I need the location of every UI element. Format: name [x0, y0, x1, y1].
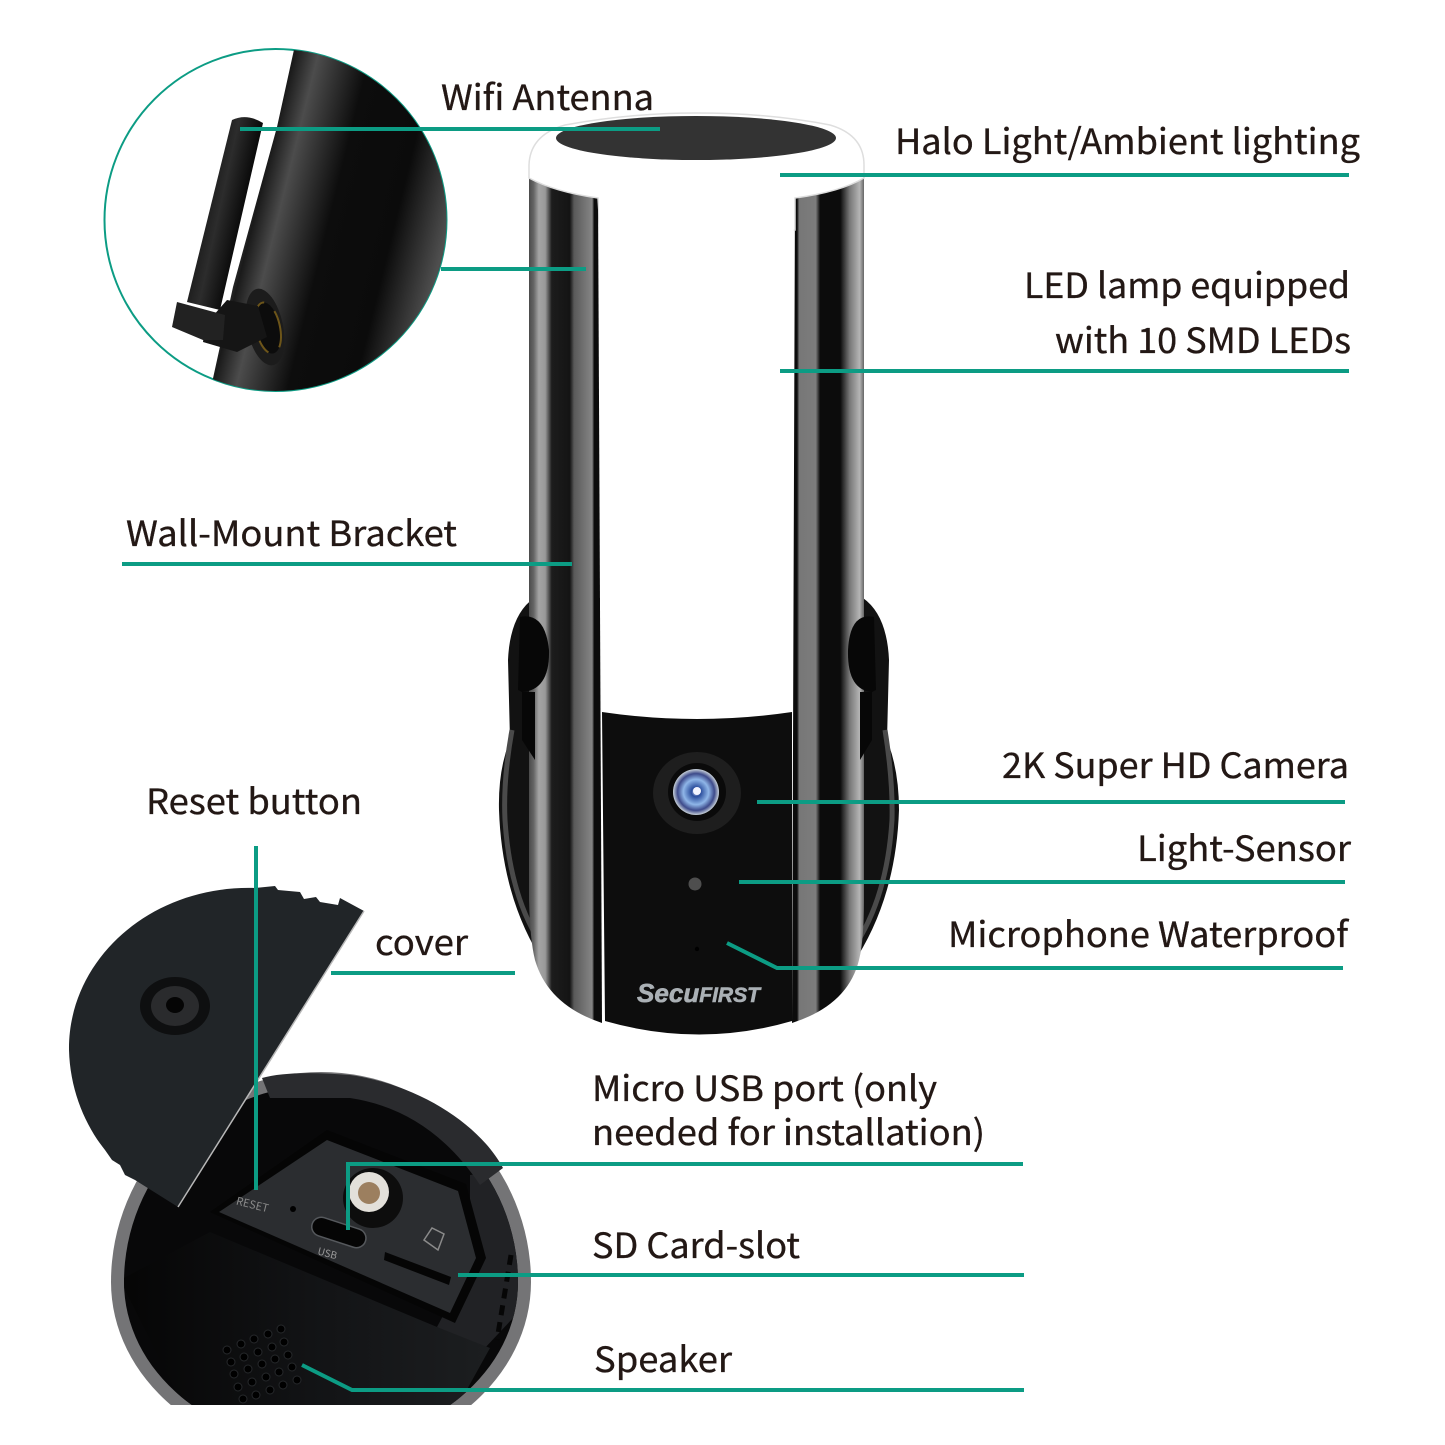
callout line: USB port — [348, 1164, 1023, 1230]
callout line: wifi antenna — [240, 127, 660, 131]
label: reset button: Reset button — [146, 774, 362, 825]
label: wall-mount bracket: Wall-Mount Bracket — [126, 506, 457, 557]
electronics compartment — [210, 1130, 486, 1323]
base disc — [111, 1072, 531, 1405]
callout line: speaker — [302, 1365, 1024, 1390]
cover knob — [140, 977, 210, 1035]
label: speaker: Speaker — [594, 1332, 732, 1383]
callout line: antenna circle — [441, 267, 586, 271]
callout line: light sensor — [739, 880, 1345, 884]
SD card slot — [384, 1228, 451, 1285]
top dark cap — [556, 116, 836, 160]
halo light ring — [529, 113, 864, 230]
camera body close-up — [210, 45, 460, 392]
label: cover: cover — [375, 915, 468, 966]
callout line: camera — [757, 800, 1345, 804]
microphone hole — [695, 947, 699, 951]
label: SD card slot: SD Card-slot — [592, 1218, 800, 1269]
reset label: RESET — [234, 1193, 271, 1216]
panel: opened base compartment — [69, 886, 531, 1445]
vents — [497, 1255, 511, 1340]
label: camera: 2K Super HD Camera — [1002, 738, 1349, 789]
panel: antenna detail circle — [104, 45, 460, 392]
hinged cover — [69, 886, 364, 1207]
label: micro USB line two: needed for installation) — [592, 1105, 985, 1156]
label: wifi antenna: Wifi Antenna — [441, 70, 654, 121]
threaded insert — [343, 1168, 403, 1228]
label: LED lamp line two: with 10 SMD LEDs — [1055, 313, 1351, 364]
label: halo light: Halo Light/Ambient lighting — [895, 114, 1360, 165]
bracket pivot ears — [518, 616, 876, 760]
right body strip — [792, 170, 864, 1023]
callout line: reset button — [254, 846, 258, 1190]
label: micro USB line one: Micro USB port (only — [592, 1061, 937, 1112]
lower floor and right wall — [124, 1174, 518, 1405]
upper dark rim — [262, 1073, 503, 1185]
callout line: LED lamp — [780, 369, 1349, 373]
icon: antenna — [172, 117, 291, 369]
callout line: wall-mount bracket — [122, 562, 572, 566]
reset hole — [290, 1206, 296, 1212]
camera front panel — [602, 712, 792, 1034]
speaker grille — [223, 1325, 301, 1403]
label: light sensor: Light-Sensor — [1137, 821, 1351, 872]
callout line: SD card slot — [458, 1273, 1024, 1277]
light sensor — [688, 878, 702, 890]
callout line: halo light — [780, 173, 1349, 177]
panel: camera product — [499, 113, 899, 1034]
LED lamp panel — [599, 200, 794, 719]
camera lens — [653, 752, 741, 834]
USB port — [311, 1216, 367, 1259]
wall-mount bracket back plate — [499, 598, 899, 965]
brand logo: SecuFIRST — [637, 978, 762, 1008]
callout line: cover — [331, 971, 515, 975]
callout line: microphone — [727, 943, 1343, 968]
left body strip — [529, 170, 602, 1023]
label: microphone: Microphone Waterproof — [948, 907, 1350, 958]
label: LED lamp line one: LED lamp equipped — [1024, 258, 1350, 309]
USB port: USB — [316, 1243, 340, 1262]
